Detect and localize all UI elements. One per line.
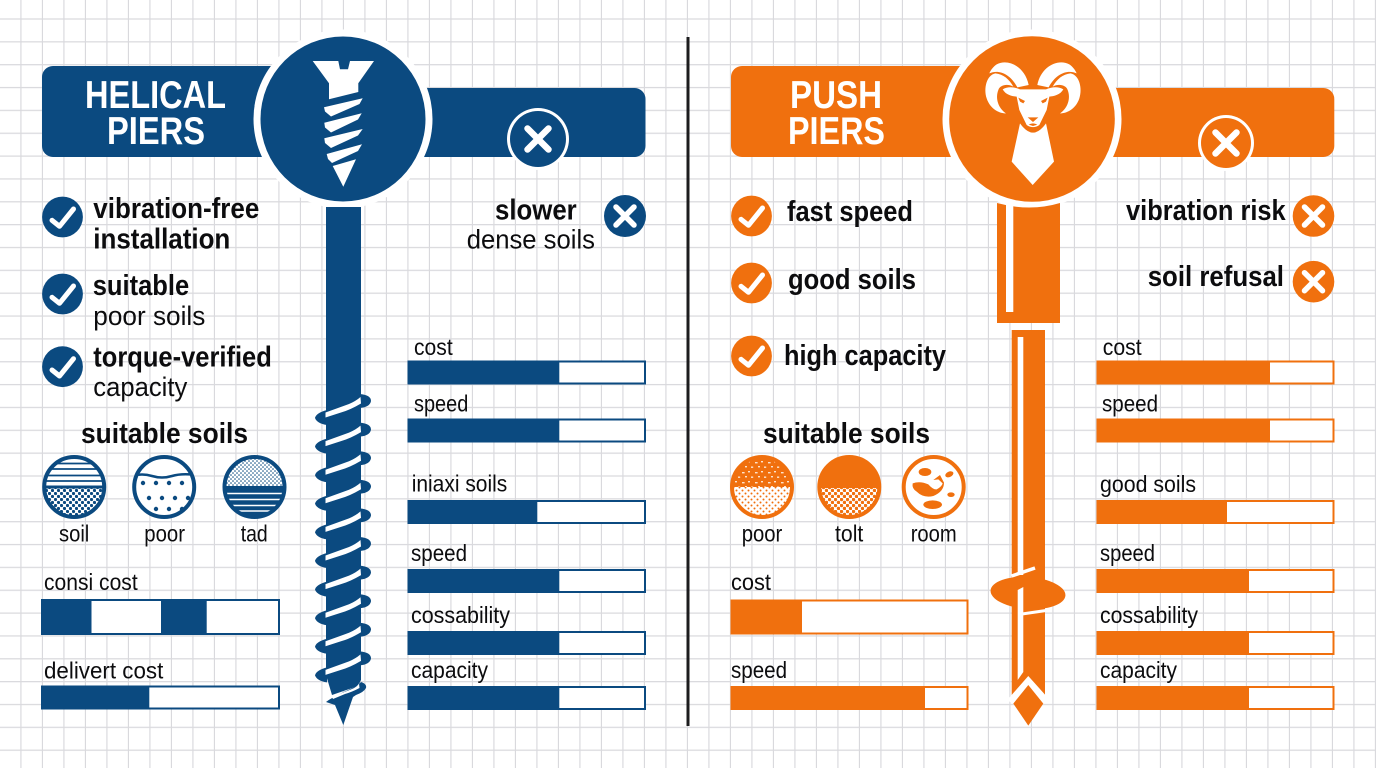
icon: header cross bbox=[1198, 115, 1254, 171]
icon: screw badge bbox=[254, 30, 432, 208]
bar: speed 2: speed bbox=[1100, 540, 1155, 566]
bar: cossability: cossability bbox=[411, 602, 510, 628]
icon: tad: tad bbox=[241, 521, 268, 547]
con: vibration risk bbox=[1126, 195, 1334, 237]
bar: cossability bbox=[1097, 602, 1334, 655]
cons list bbox=[1126, 195, 1334, 303]
bar: speed bbox=[1097, 391, 1334, 442]
bar: delivert cost bbox=[42, 657, 279, 709]
bar: consi cost: consi cost bbox=[44, 569, 138, 595]
bar: good soils: good soils bbox=[1100, 471, 1196, 497]
screw illustration bbox=[315, 207, 371, 725]
bars: right column bbox=[408, 334, 645, 710]
con: soil refusal bbox=[1148, 261, 1334, 303]
bar: cost bbox=[408, 334, 645, 384]
push pier illustration bbox=[989, 203, 1067, 726]
icon: tolt: tolt bbox=[835, 521, 864, 547]
pro: suitable poor soils: suitable bbox=[93, 270, 189, 302]
pro: vibration-free installation bbox=[42, 193, 259, 255]
bar: delivert cost: delivert cost bbox=[44, 657, 164, 683]
bar: speed: speed bbox=[731, 657, 787, 683]
con: slower dense soils: dense soils bbox=[467, 224, 595, 254]
bar: speed 2: speed bbox=[411, 540, 467, 566]
bars: left column bbox=[730, 569, 968, 710]
con: slower dense soils bbox=[467, 194, 646, 254]
con: vibration risk: vibration risk bbox=[1126, 195, 1286, 227]
header: helical piers bbox=[42, 30, 646, 208]
pro: good soils bbox=[731, 263, 916, 303]
bar: speed bbox=[408, 391, 645, 442]
heading: helical piers: PIERS bbox=[107, 110, 205, 153]
bar: speed bbox=[730, 657, 968, 710]
bar: cost bbox=[1097, 334, 1334, 384]
bar: good soils bbox=[1097, 471, 1334, 524]
icon: poor bbox=[730, 455, 794, 547]
pro: good soils: good soils bbox=[788, 264, 916, 296]
panel: helical piers bbox=[42, 30, 646, 725]
pro: suitable poor soils bbox=[42, 270, 205, 331]
bar: cost: cost bbox=[414, 334, 453, 360]
bar: capacity: capacity bbox=[411, 657, 488, 683]
heading: helical piers bbox=[85, 74, 226, 153]
panel: push piers bbox=[730, 30, 1334, 726]
heading: suitable soils: suitable soils bbox=[763, 418, 930, 450]
icon: room bbox=[904, 457, 964, 547]
con: slower dense soils: slower bbox=[495, 194, 577, 226]
icon: ram badge bbox=[942, 30, 1122, 208]
heading: helical piers: HELICAL bbox=[85, 74, 226, 117]
heading: push piers: PUSH bbox=[790, 74, 882, 117]
bar: capacity bbox=[1097, 657, 1334, 710]
bar: iniaxi soils bbox=[408, 471, 645, 524]
bar: speed 2 bbox=[408, 540, 645, 592]
header: push piers bbox=[731, 30, 1334, 208]
icon: soil: soil bbox=[59, 521, 89, 547]
bar: iniaxi soils: iniaxi soils bbox=[412, 471, 507, 497]
pro: high capacity bbox=[731, 336, 946, 376]
bar: capacity: capacity bbox=[1100, 657, 1177, 683]
heading: push piers bbox=[788, 74, 885, 153]
icon: room: room bbox=[911, 521, 957, 547]
pro: vibration-free installation: vibration-free bbox=[93, 193, 259, 225]
soil icons bbox=[730, 455, 964, 547]
bar: cost: cost bbox=[731, 569, 772, 595]
bar: speed: speed bbox=[1102, 391, 1158, 417]
bar: speed 2 bbox=[1097, 540, 1334, 592]
pro: fast speed: fast speed bbox=[787, 196, 913, 228]
pros list bbox=[42, 193, 272, 402]
pro: fast speed bbox=[731, 196, 913, 236]
pro: torque-verified capacity: torque-verified bbox=[93, 342, 272, 374]
bar: speed: speed bbox=[414, 391, 468, 417]
pro: vibration-free installation: installation bbox=[93, 223, 230, 255]
icon: tolt bbox=[817, 455, 882, 547]
con: soil refusal: soil refusal bbox=[1148, 261, 1284, 293]
heading: suitable soils: suitable soils bbox=[81, 418, 248, 450]
pros list bbox=[731, 196, 946, 376]
pro: suitable poor soils: poor soils bbox=[93, 301, 205, 331]
pro: torque-verified capacity: capacity bbox=[93, 372, 188, 402]
icon: poor: poor bbox=[144, 521, 185, 547]
bar: capacity bbox=[408, 657, 645, 710]
bar: cost: cost bbox=[1103, 334, 1142, 360]
bars: right column bbox=[1097, 334, 1334, 710]
bars: left column bbox=[42, 569, 279, 709]
icon: poor: poor bbox=[742, 521, 783, 547]
divider between panels bbox=[686, 37, 690, 726]
bar: cossability: cossability bbox=[1100, 602, 1198, 628]
icon: header cross bbox=[507, 108, 569, 170]
icon: tad bbox=[222, 455, 287, 547]
bar: cost bbox=[730, 569, 968, 634]
icon: poor bbox=[132, 457, 196, 547]
icon: soil bbox=[42, 457, 106, 547]
bar: consi cost bbox=[42, 569, 279, 634]
bar: cossability bbox=[408, 602, 645, 655]
heading: push piers: PIERS bbox=[788, 110, 885, 153]
pro: torque-verified capacity bbox=[42, 342, 272, 402]
pro: high capacity: high capacity bbox=[784, 340, 946, 372]
soil icons bbox=[42, 455, 287, 547]
